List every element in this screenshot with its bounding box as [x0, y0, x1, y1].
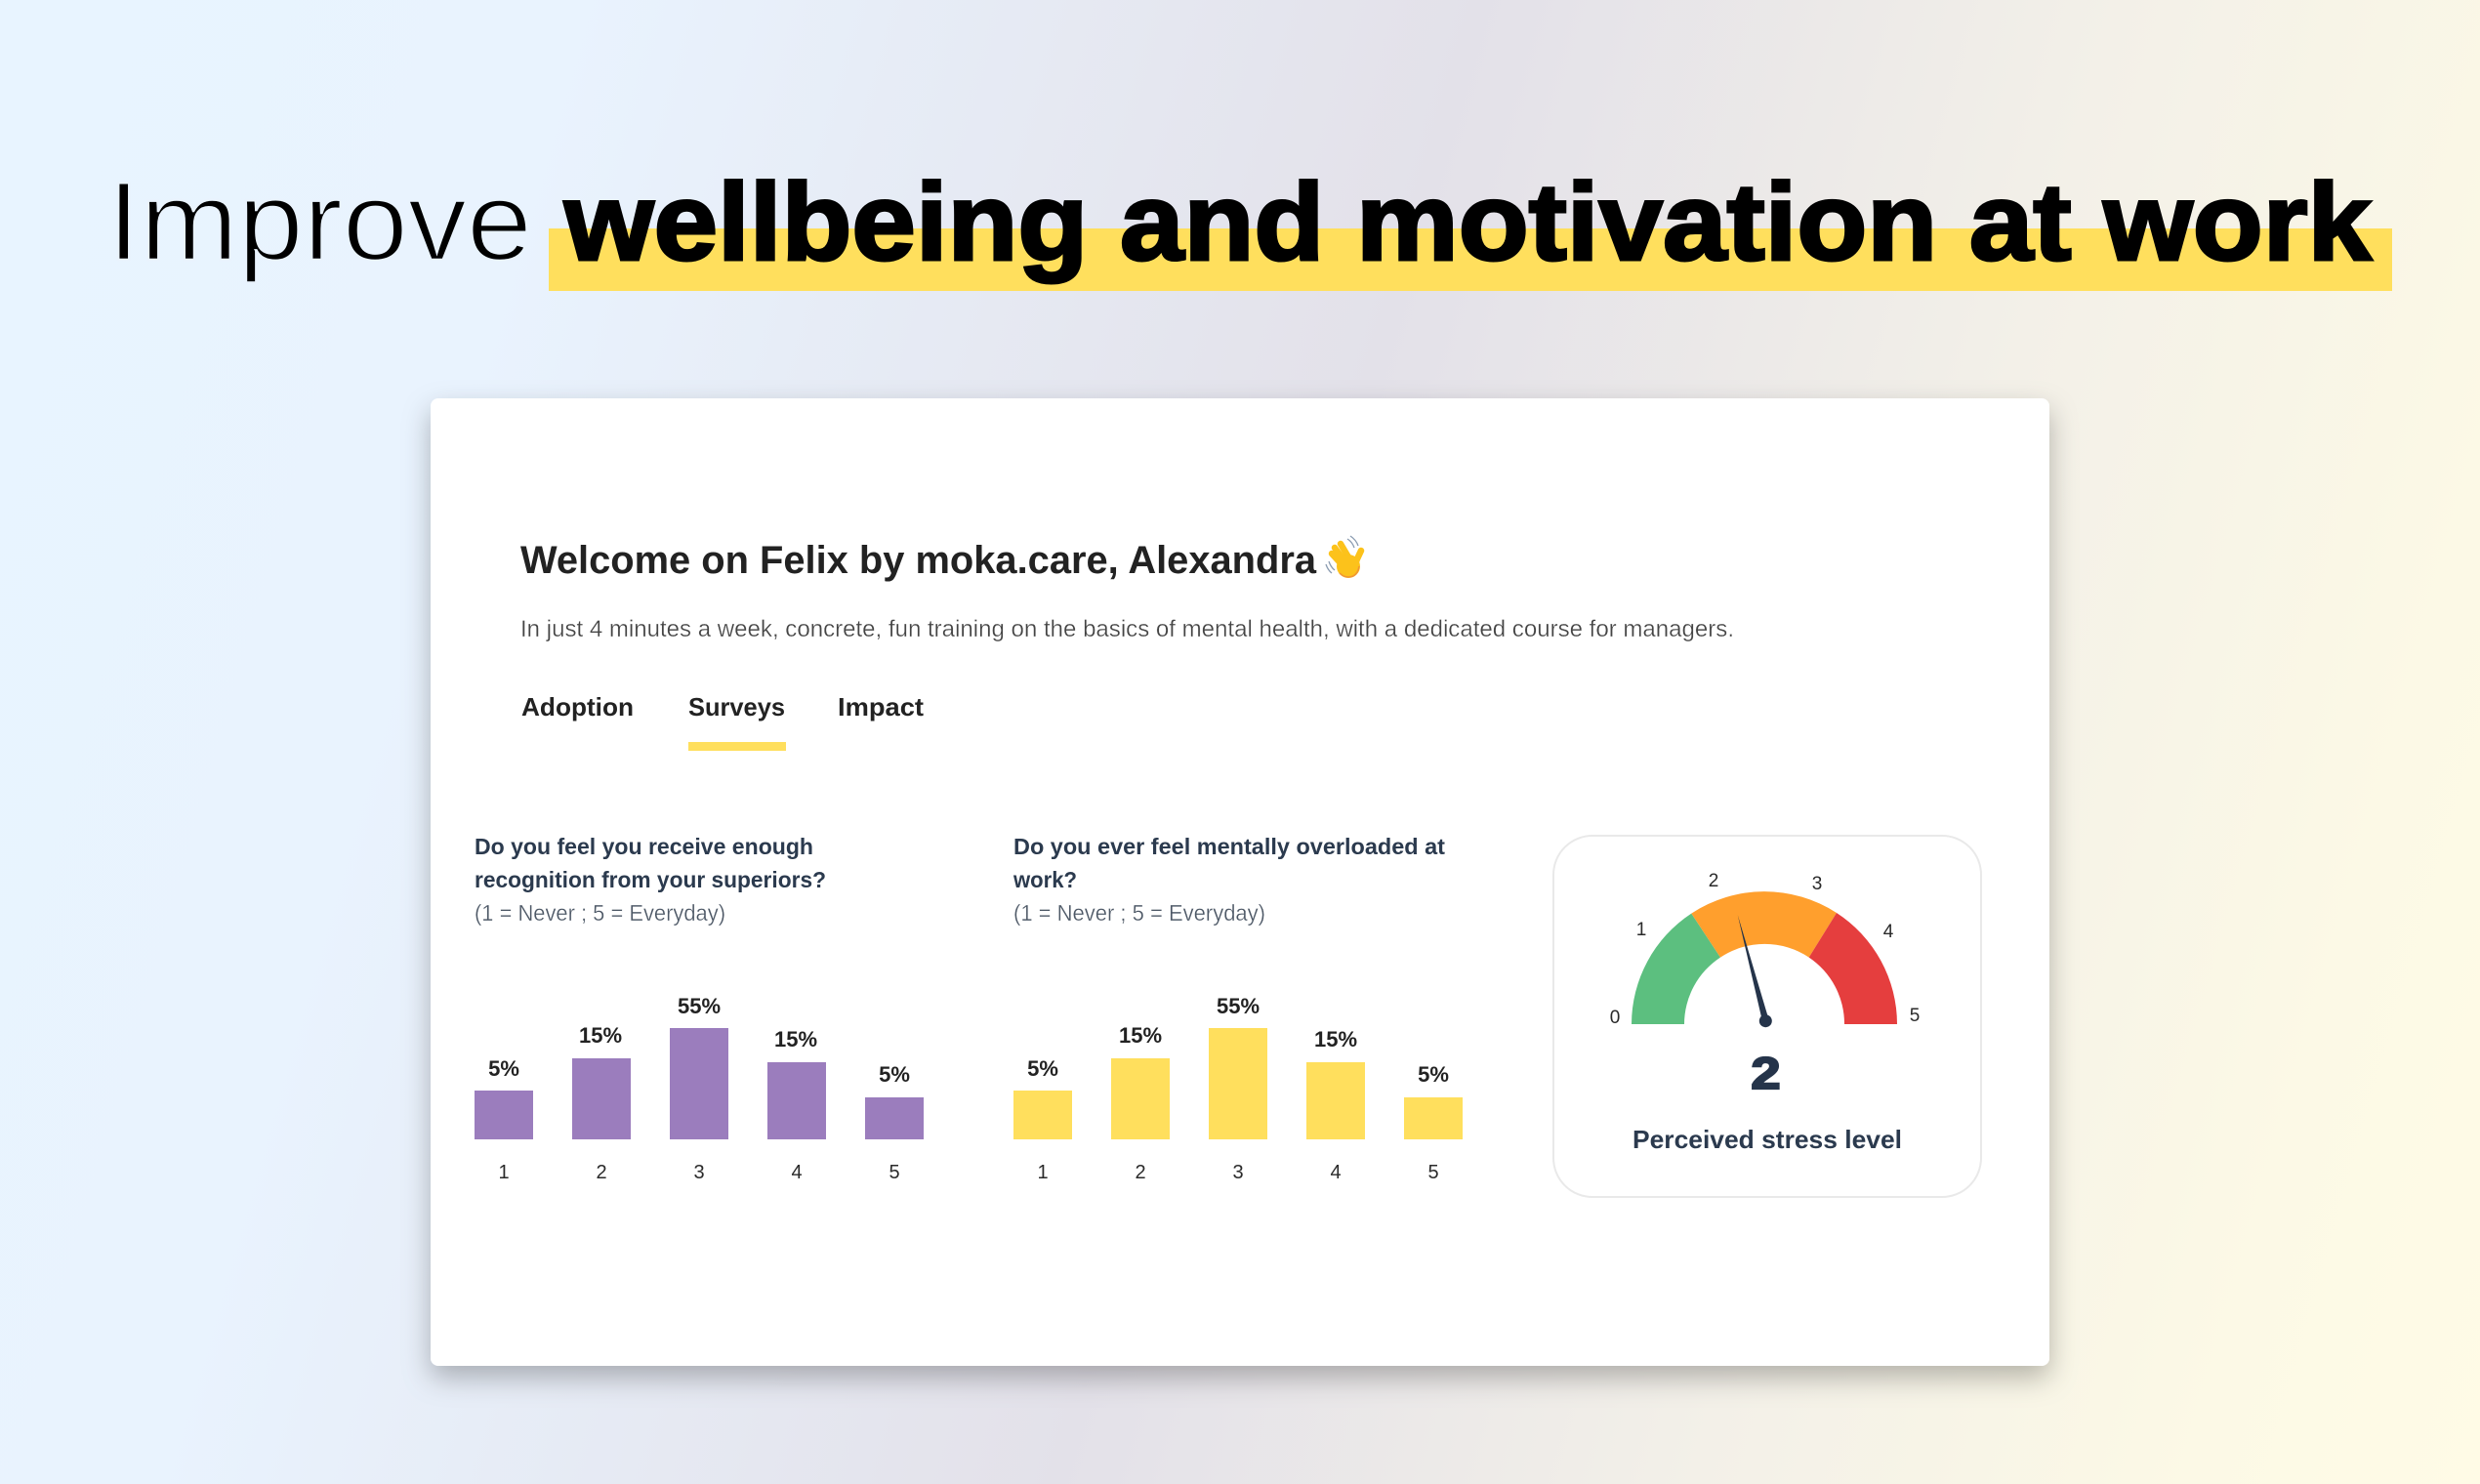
tab: Surveys: Surveys	[688, 692, 785, 721]
value labels: 15%	[579, 1023, 622, 1048]
question text: work?	[1013, 867, 1077, 892]
chart: recognition question	[475, 834, 924, 1183]
value labels: 5%	[879, 1062, 910, 1087]
question text: recognition from your superiors?	[475, 867, 826, 892]
active tab underline	[688, 742, 786, 751]
value labels: 5%	[1418, 1062, 1449, 1087]
gauge scale labels: 5	[1910, 1006, 1920, 1026]
axis labels: 2	[1135, 1162, 1146, 1183]
title	[107, 160, 2392, 291]
value labels: 5%	[488, 1056, 519, 1081]
tab: Adoption: Adoption	[521, 692, 634, 721]
bars	[475, 1028, 924, 1139]
axis labels	[1037, 1162, 1439, 1183]
gauge needle	[1738, 915, 1772, 1027]
gauge scale labels	[1610, 871, 1920, 1028]
title bold text: wellbeing and motivation at work	[563, 161, 2373, 283]
question text: Do you feel you receive enough	[475, 834, 813, 859]
gauge value: 2	[1752, 1049, 1781, 1098]
question text	[475, 834, 826, 926]
value labels: 15%	[1119, 1023, 1162, 1048]
card background	[431, 398, 2049, 1366]
title highlight	[549, 228, 2392, 291]
value labels: 55%	[1217, 994, 1260, 1018]
axis labels: 1	[1037, 1162, 1049, 1183]
question text: Do you ever feel mentally overloaded at	[1013, 834, 1445, 859]
intro text: In just 4 minutes a week, concrete, fun training on the basics of mental health, with a dedicated course for managers.	[520, 616, 1734, 642]
axis labels: 2	[596, 1162, 607, 1183]
gauge scale labels: 1	[1636, 920, 1646, 940]
question text: (1 = Never ; 5 = Everyday)	[475, 900, 725, 926]
axis labels: 3	[1232, 1162, 1244, 1183]
gauge card outline	[1553, 836, 1981, 1197]
title light text: Improve	[107, 160, 532, 284]
gauge orange segment	[1691, 891, 1837, 958]
panel: stress gauge	[1553, 836, 1981, 1197]
gauge scale labels: 4	[1883, 922, 1894, 942]
axis labels: 5	[1427, 1162, 1439, 1183]
question text: (1 = Never ; 5 = Everyday)	[1013, 900, 1265, 926]
icon: waving hand	[1326, 536, 1361, 578]
bars	[1013, 1028, 1463, 1139]
axis labels	[498, 1162, 900, 1183]
chart: mental overload question	[1013, 834, 1463, 1183]
gauge green segment	[1632, 914, 1720, 1024]
value labels	[488, 994, 910, 1087]
gauge caption: Perceived stress level	[1633, 1125, 1902, 1154]
panel: dashboard card	[431, 398, 2049, 1366]
gauge red segment	[1809, 913, 1897, 1024]
axis labels: 4	[1330, 1162, 1342, 1183]
value labels	[1027, 994, 1449, 1087]
axis labels: 3	[693, 1162, 705, 1183]
tab: Impact: Impact	[838, 692, 924, 721]
value labels: 15%	[774, 1027, 817, 1051]
gauge scale labels: 0	[1610, 1008, 1620, 1028]
axis labels: 1	[498, 1162, 510, 1183]
question text	[1013, 834, 1445, 926]
tabs	[521, 692, 924, 751]
axis labels: 5	[889, 1162, 900, 1183]
value labels: 55%	[678, 994, 721, 1018]
value labels: 15%	[1314, 1027, 1357, 1051]
axis labels: 4	[791, 1162, 803, 1183]
value labels: 5%	[1027, 1056, 1058, 1081]
heading: Welcome on Felix by moka.care, Alexandra	[520, 539, 1317, 582]
gauge scale labels: 3	[1812, 874, 1822, 894]
gauge scale labels: 2	[1709, 871, 1718, 891]
